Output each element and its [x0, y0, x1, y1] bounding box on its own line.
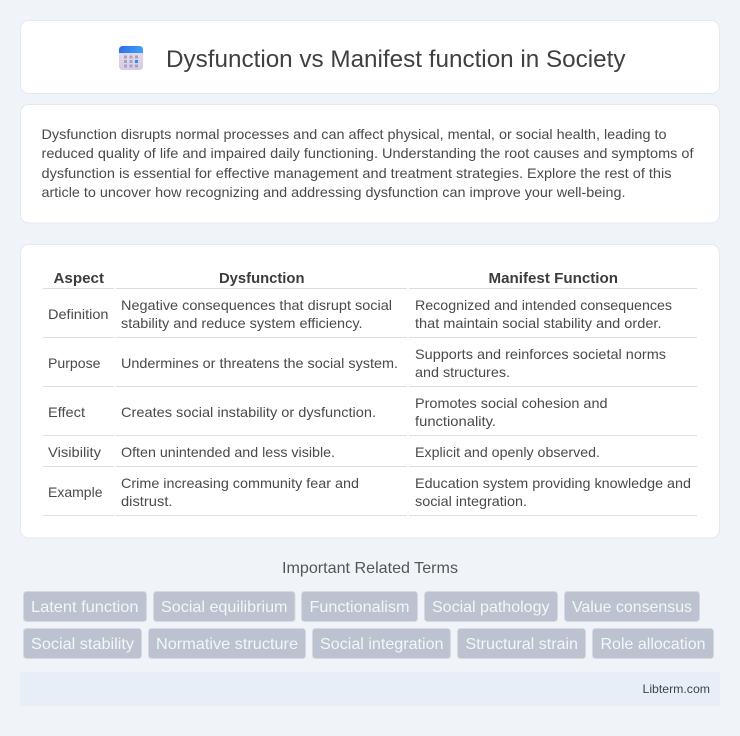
icon: calendar	[119, 46, 143, 70]
intro paragraph	[42, 126, 694, 200]
row: effect: Promotes social cohesion and	[415, 395, 608, 411]
row: example: Education system providing knowledge and	[415, 475, 691, 491]
row: definition: stability and reduce system efficiency.	[121, 315, 362, 331]
tag: value consensus	[564, 592, 700, 622]
tag: social equilibrium: Social equilibrium	[161, 599, 288, 616]
tag: latent function	[24, 592, 146, 622]
related terms heading: Important Related Terms	[282, 560, 458, 577]
intro paragraph: reduced quality of life and impaired daily functioning. Understanding the root causes and symptoms of	[42, 145, 694, 161]
row: definition: Recognized and intended consequences	[415, 297, 672, 313]
table header row: Dysfunction	[219, 271, 304, 287]
comparison table panel	[20, 244, 720, 538]
tag: value consensus: Value consensus	[572, 599, 692, 616]
tag: normative structure: Normative structure	[156, 636, 298, 653]
tag: role allocation	[592, 628, 714, 658]
tag: normative structure	[148, 628, 306, 658]
row: example: social integration.	[415, 493, 527, 509]
row: definition: that maintain social stability and order.	[415, 315, 662, 331]
table header row	[43, 271, 697, 289]
row: purpose: and structures.	[415, 364, 510, 380]
row: visibility	[43, 444, 697, 467]
related term tags	[24, 592, 714, 658]
row: effect	[43, 395, 697, 436]
tag: social stability: Social stability	[31, 636, 134, 653]
row: effect: Creates social instability or dysfunction.	[121, 404, 376, 420]
row: effect: functionality.	[415, 413, 496, 429]
row: example: Crime increasing community fear and	[121, 475, 359, 491]
row: visibility: Explicit and openly observed.	[415, 444, 600, 460]
table header row: Manifest Function	[488, 271, 618, 287]
row: purpose: Undermines or threatens the social system.	[121, 355, 398, 371]
row: visibility: Visibility	[48, 444, 101, 460]
tag: structural strain	[458, 628, 586, 658]
row: purpose: Supports and reinforces societal norms	[415, 346, 666, 362]
title: Dysfunction vs Manifest function in Society	[166, 46, 626, 73]
row: purpose: Purpose	[48, 355, 101, 371]
footer	[20, 672, 720, 706]
row: visibility: Often unintended and less visible.	[121, 444, 335, 460]
tag: social equilibrium	[154, 592, 295, 622]
tag: role allocation: Role allocation	[600, 636, 706, 653]
row: example	[43, 475, 697, 516]
intro paragraph: article to uncover how recognizing and addressing dysfunction can improve your well-being.	[42, 184, 625, 200]
intro paragraph: dysfunction is essential for effective management and treatment strategies. Explore the rest of this	[42, 165, 671, 181]
footer credit: Libterm.com	[642, 682, 710, 696]
tag: latent function: Latent function	[31, 599, 138, 616]
tag: functionalism	[302, 592, 418, 622]
intro paragraph: Dysfunction disrupts normal processes and can affect physical, mental, or social health, leading to	[42, 126, 667, 142]
tag: functionalism: Functionalism	[310, 599, 410, 616]
tag: structural strain: Structural strain	[466, 636, 578, 653]
intro panel	[20, 104, 720, 223]
row: example: Example	[48, 484, 103, 500]
tag: social stability	[24, 628, 142, 658]
row: purpose	[43, 346, 697, 387]
row: definition: Definition	[48, 306, 108, 322]
tag: social integration: Social integration	[320, 636, 444, 653]
row: definition	[43, 297, 697, 338]
row: example: distrust.	[121, 493, 172, 509]
row: effect: Effect	[48, 404, 85, 420]
table header row: Aspect	[54, 271, 104, 287]
tag: social pathology	[424, 592, 558, 622]
tag: social integration	[312, 628, 450, 658]
row: definition: Negative consequences that disrupt social	[121, 297, 392, 313]
header panel	[20, 20, 720, 94]
tag: social pathology: Social pathology	[432, 599, 550, 616]
